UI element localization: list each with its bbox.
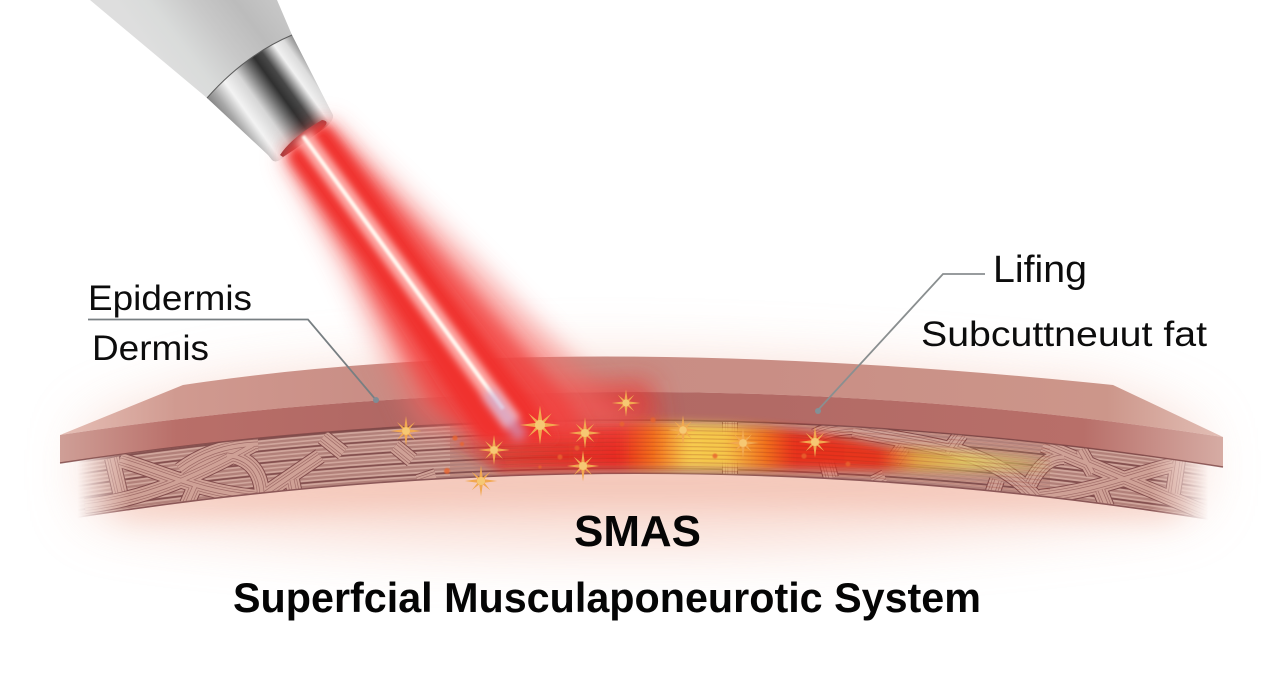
emitter opening bbox=[280, 120, 327, 157]
label: Dermis: Dermis bbox=[92, 329, 209, 368]
laser heat spread in tissue bbox=[448, 367, 1050, 490]
laser handpiece bbox=[90, 0, 333, 162]
label: Lifing: Lifing bbox=[993, 249, 1087, 291]
front face: dermis bbox=[60, 392, 1223, 467]
sparkles and heat particles bbox=[390, 389, 850, 496]
skin layers bbox=[40, 356, 1240, 523]
handpiece body bbox=[90, 0, 292, 98]
label: Subcutaneous fat: Subcuttneuut fat bbox=[921, 315, 1207, 354]
upper surface: epidermis bbox=[60, 356, 1223, 437]
muscle fibre band: SMAS bbox=[80, 420, 1206, 519]
label: Epidermis: Epidermis bbox=[88, 279, 252, 318]
heading: SMAS: SMAS bbox=[574, 507, 701, 556]
metal collar bbox=[207, 35, 333, 162]
soft skin glow bbox=[90, 364, 1195, 545]
subheading: full name: Superfcial Musculaponeurotic System bbox=[233, 574, 981, 621]
laser beam bbox=[283, 120, 650, 440]
leader line: Epidermis bbox=[88, 320, 379, 403]
leader line: Lifing bbox=[815, 274, 985, 414]
sparkle stars bbox=[390, 416, 422, 446]
